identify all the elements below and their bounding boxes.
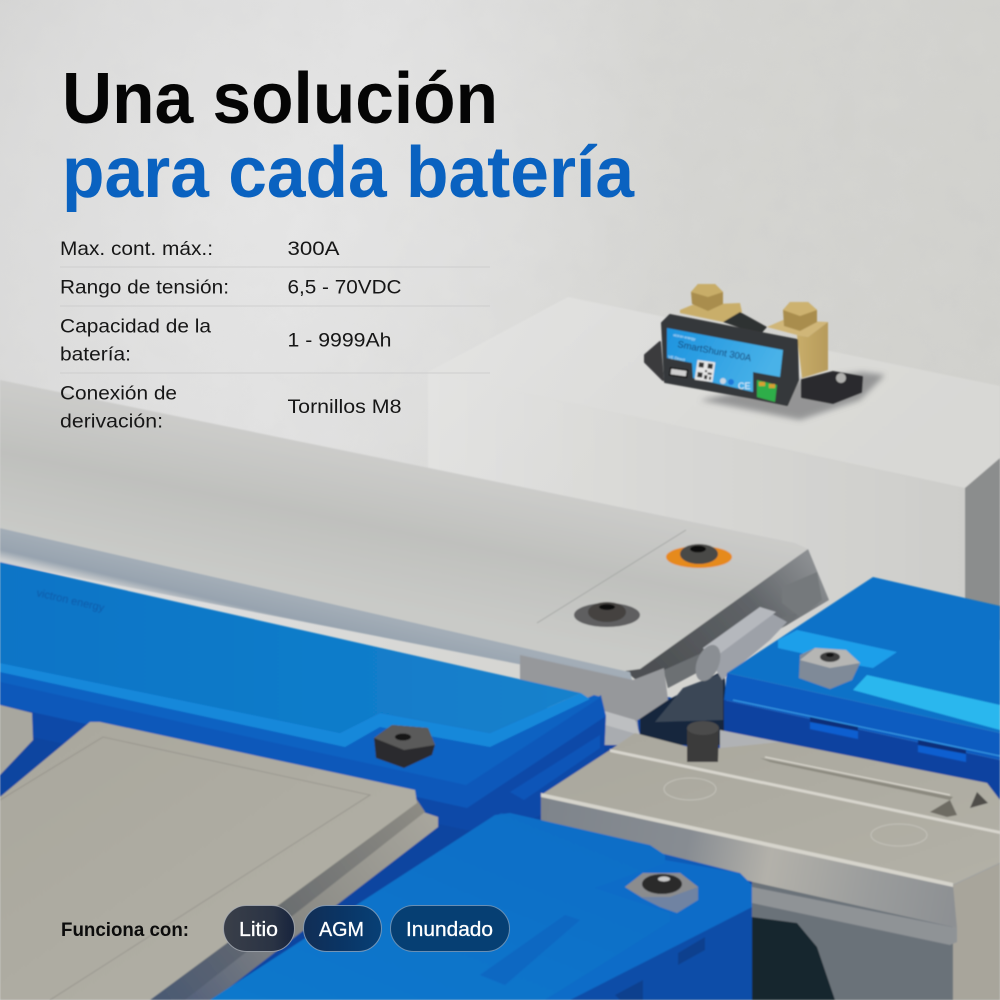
battery: blue right	[724, 577, 1000, 840]
dark backing behind batteries	[0, 660, 1000, 1000]
battery: blue front	[210, 813, 752, 1000]
cyan stripe front	[853, 675, 1000, 730]
row: shunt connection: derivación:	[60, 410, 163, 432]
title: Una solución	[62, 59, 498, 139]
row: shunt connection: Tornillos M8	[288, 396, 402, 418]
row: voltage range: Rango de tensión:	[60, 276, 229, 298]
label: VE.Direct	[668, 354, 686, 362]
title: para cada batería	[62, 133, 635, 213]
terminal: dark	[574, 602, 640, 627]
row: battery capacity: Capacidad de la	[60, 316, 211, 338]
left flange	[645, 342, 663, 380]
label: CE	[738, 381, 751, 391]
pill: Inundado	[390, 906, 510, 952]
hex nut: silver	[799, 648, 860, 689]
right flange	[802, 372, 862, 403]
label	[667, 328, 783, 392]
cable	[691, 607, 787, 685]
row: battery capacity: 1 - 9999Ah	[288, 330, 392, 352]
row: shunt connection	[60, 382, 402, 432]
battery: beige rear right	[541, 721, 1000, 1000]
green terminal	[757, 380, 777, 402]
terminal post	[687, 721, 719, 762]
pill: AGM	[304, 906, 382, 952]
terminal: orange	[666, 544, 732, 568]
works-with label: Funciona con:	[61, 919, 189, 941]
pill: Inundado: Inundado	[406, 919, 493, 941]
dark rear body	[723, 312, 767, 335]
label: SmartShunt 300A	[676, 339, 753, 364]
hex nut	[374, 725, 435, 768]
product: SmartShunt	[645, 284, 885, 420]
battery: grey with orange terminal	[0, 380, 829, 745]
slots	[810, 717, 858, 739]
row: max current: 300A	[288, 238, 340, 260]
engraved brand: victron energy	[35, 587, 106, 615]
shadow	[700, 372, 885, 420]
background: concrete block	[428, 297, 1000, 640]
specs table	[60, 238, 490, 432]
hex nut: chrome	[625, 873, 698, 913]
row: battery capacity	[60, 316, 392, 366]
battery: beige front left	[0, 722, 438, 1000]
row: voltage range: 6,5 - 70VDC	[288, 276, 402, 298]
cyan stripe rear	[778, 630, 897, 668]
title	[62, 59, 635, 213]
battery: blue with hex nut (left)	[0, 562, 606, 830]
body	[662, 315, 798, 405]
haze over upper left	[0, 0, 1000, 700]
brass block rear	[680, 284, 742, 322]
row: battery capacity: batería:	[60, 344, 131, 366]
label: victron energy	[673, 333, 696, 341]
pill: Litio: Litio	[239, 919, 278, 941]
row: max current	[60, 238, 340, 260]
row: shunt connection: Conexión de	[60, 382, 177, 404]
brass block front	[767, 302, 828, 378]
row: voltage range	[60, 276, 402, 298]
port	[670, 368, 687, 377]
battery scene	[0, 380, 1000, 1000]
row: max current: Max. cont. máx.:	[60, 238, 213, 260]
pill: AGM: AGM	[319, 919, 364, 941]
battery: beige small at left edge	[0, 705, 33, 775]
pill: Litio	[224, 906, 294, 952]
